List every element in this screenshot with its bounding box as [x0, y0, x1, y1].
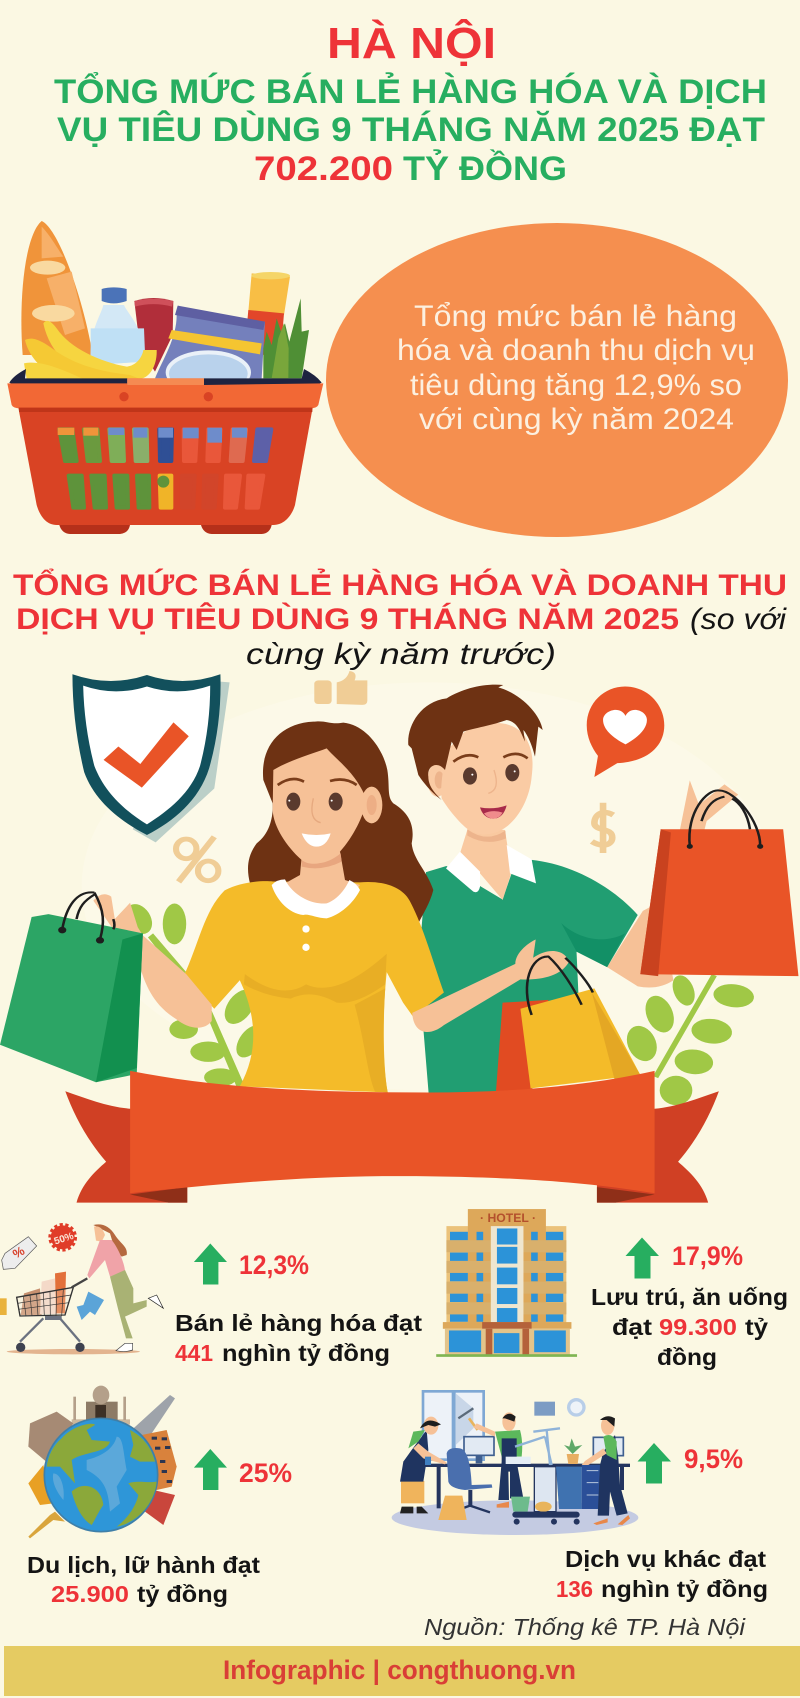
- stat label: Du lịch, lữ hành đạt: [27, 1552, 260, 1578]
- title: TỔNG MỨC BÁN LẺ HÀNG HÓA VÀ DỊCH: [54, 73, 767, 111]
- plant leaves: [121, 901, 756, 1105]
- icon: woman with shopping cart: %: [10, 1244, 27, 1261]
- stat: other services: [392, 1390, 768, 1602]
- title: [54, 17, 767, 188]
- icon: hotel building: [436, 1209, 577, 1357]
- stat label: nghìn tỷ đồng: [222, 1340, 390, 1366]
- stat label: 25.900: [51, 1581, 129, 1607]
- stat label: Dịch vụ khác đạt: [565, 1546, 766, 1572]
- source note: Nguồn: Thống kê TP. Hà Nội: [424, 1614, 746, 1640]
- title: 702.200: [254, 150, 393, 188]
- icon: shopping basket with groceries: [7, 221, 323, 534]
- footer bar: Infographic | congthuong.vn: [223, 1655, 576, 1685]
- arms, bags and ribbon: [0, 892, 719, 1203]
- stat value: 17,9%: [672, 1241, 743, 1271]
- woman: head and collar: [272, 748, 382, 951]
- backdrop and floating icons: [72, 671, 776, 1105]
- footer bar: [4, 1646, 800, 1696]
- stat label: tỷ đồng: [137, 1581, 228, 1607]
- icon: globe with landmarks: [28, 1386, 177, 1538]
- woman: hair: [248, 721, 433, 923]
- woman: arms: [93, 894, 569, 1032]
- heading: section title: cùng kỳ năm trước): [246, 638, 556, 671]
- panel: growth callout ellipse: [326, 223, 788, 537]
- woman: dress: [184, 881, 444, 1092]
- stat label: 99.300: [659, 1314, 737, 1340]
- heading: section title: (so với: [690, 603, 787, 636]
- ribbon banner: [65, 1071, 719, 1203]
- icon: percent sign: [176, 835, 218, 884]
- icon: green arrow: [626, 1238, 659, 1278]
- icon: thumbs up: [314, 671, 367, 705]
- panel: growth callout ellipse: tiêu dùng tăng 12,9% so: [410, 369, 742, 402]
- stat value: 9,5%: [684, 1444, 743, 1474]
- icon: red shopping bag: [640, 790, 798, 976]
- title: TỶ ĐỒNG: [403, 150, 567, 188]
- heading: section title: [13, 568, 787, 671]
- stat label: nghìn tỷ đồng: [601, 1576, 768, 1602]
- icon: dollar sign: [592, 803, 613, 853]
- stat label: Lưu trú, ăn uống: [591, 1284, 788, 1310]
- icon: small bags: [496, 957, 640, 1092]
- stat label: [556, 1546, 768, 1602]
- stat label: Bán lẻ hàng hóa đạt: [175, 1310, 422, 1336]
- panel: growth callout ellipse: hóa và doanh thu dịch vụ: [397, 334, 755, 367]
- icon: heart speech bubble: [587, 686, 664, 777]
- icon: woman with shopping cart: [0, 1224, 163, 1354]
- icon: cleaning staff in office: [392, 1390, 638, 1535]
- stat: tourism: [27, 1386, 292, 1607]
- stat value: 25%: [239, 1458, 292, 1488]
- stat: accommodation and catering: [436, 1209, 788, 1370]
- icon: green arrow: [638, 1443, 671, 1484]
- stat label: [175, 1310, 422, 1366]
- icon: green shopping bag: [0, 892, 143, 1082]
- panel: growth callout ellipse: với cùng kỳ năm 2024: [419, 403, 734, 436]
- stat label: [27, 1552, 260, 1607]
- illustration: couple shopping with ribbon banner: [0, 671, 798, 1203]
- title: VỤ TIÊU DÙNG 9 THÁNG NĂM 2025 ĐẠT: [57, 111, 765, 149]
- title: HÀ NỘI: [327, 17, 496, 68]
- stat: retail goods: [0, 1224, 422, 1366]
- panel: growth callout ellipse: Tổng mức bán lẻ hàng: [414, 300, 737, 333]
- icon: shield with check mark: [72, 674, 230, 842]
- stat value: 12,3%: [239, 1250, 309, 1280]
- stat label: đạt: [612, 1314, 652, 1340]
- stat label: đồng: [657, 1344, 717, 1370]
- stat label: 441: [175, 1340, 213, 1366]
- man: shirt and arm: [418, 780, 738, 1092]
- heading: section title: TỔNG MỨC BÁN LẺ HÀNG HÓA VÀ DOANH THU: [13, 568, 787, 602]
- stat label: tỷ: [745, 1314, 768, 1340]
- icon: green arrow: [194, 1449, 227, 1490]
- icon: woman with shopping cart: 50%: [53, 1231, 75, 1248]
- heading: section title: DỊCH VỤ TIÊU DÙNG 9 THÁNG NĂM 2025: [16, 602, 679, 636]
- icon: green arrow: [194, 1244, 227, 1284]
- man: head and collar: [408, 685, 543, 900]
- icon: hotel building: · HOTEL ·: [480, 1213, 536, 1225]
- stat label: [591, 1284, 788, 1370]
- stat label: 136: [556, 1576, 593, 1602]
